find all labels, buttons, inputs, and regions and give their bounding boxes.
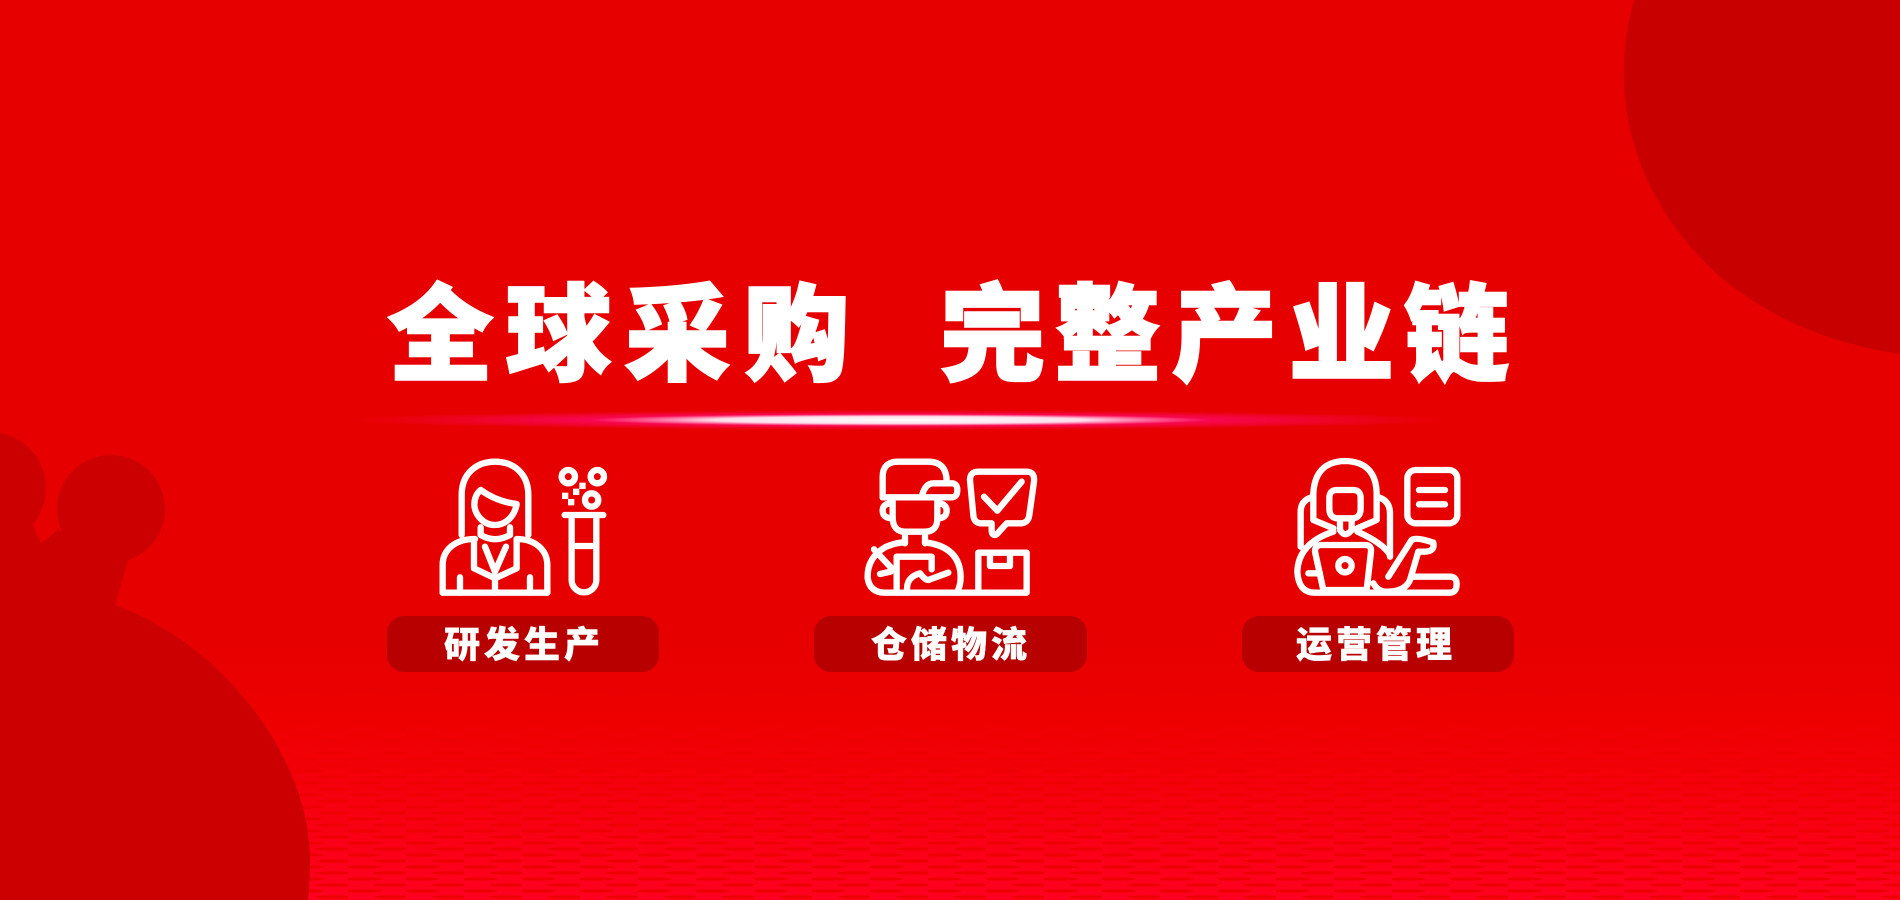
pill label: operations: 运营管理: [1296, 624, 1452, 665]
decorative blob: bottom left: [0, 432, 310, 900]
pill label: warehousing: [814, 616, 1087, 672]
icon: warehouse worker with parcel: [868, 462, 1034, 593]
icon: operator with laptop: [1297, 461, 1457, 593]
background: [264, 721, 1900, 900]
icon: researcher with test tube: [443, 462, 604, 593]
title: 全球采购完整产业链: [388, 278, 1509, 395]
pill label: R&D: 研发生产: [444, 624, 600, 665]
pill label: operations: [1242, 616, 1514, 672]
pill label: warehousing: 仓储物流: [871, 624, 1027, 665]
decorative blob: top right: [1624, 0, 1900, 354]
glowing divider: [350, 410, 1450, 430]
pill label: R&D: [387, 616, 659, 672]
